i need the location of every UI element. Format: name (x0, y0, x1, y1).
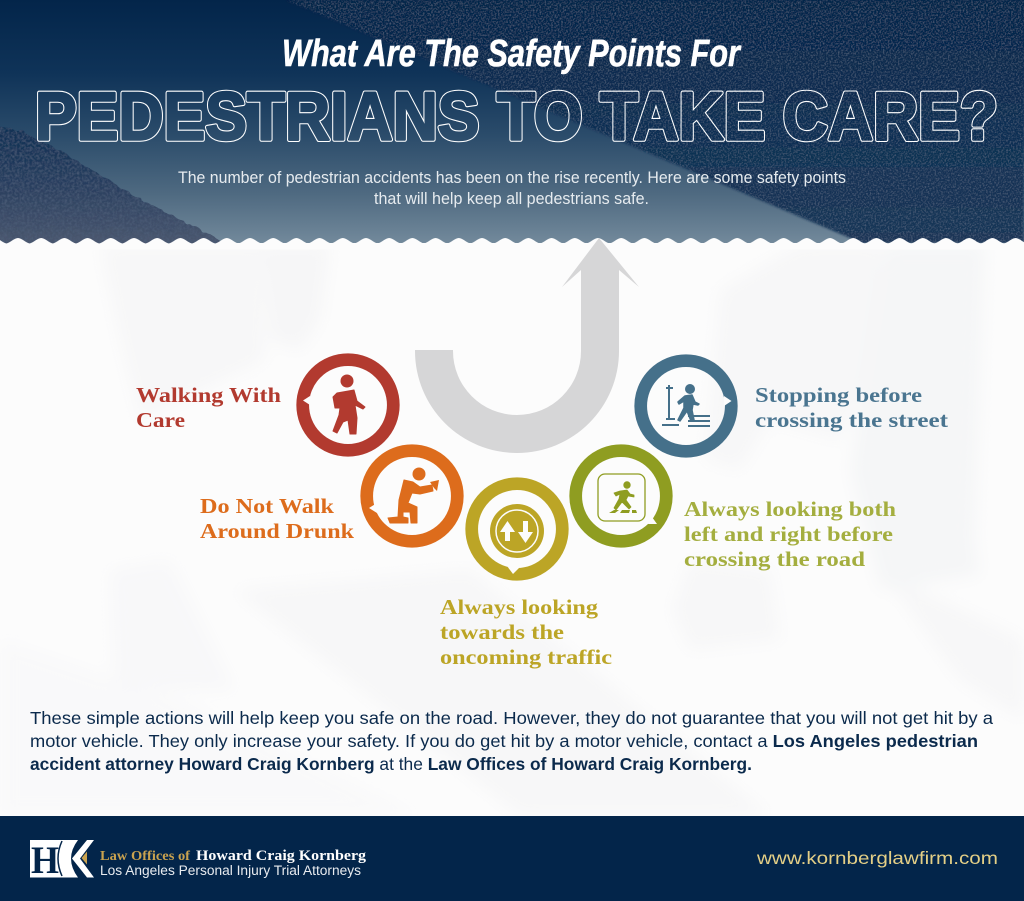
title line 1: What Are The Safety Points For (282, 33, 742, 75)
step: stopping before crossing (641, 361, 948, 451)
logo HCK: H (31, 839, 59, 882)
closing paragraph: motor vehicle. They only increase your safety. If you do get hit by a motor vehicle, contact a Los Angeles pedestrian (30, 731, 978, 751)
step: looking both ways (576, 451, 896, 571)
label: crossing the road (684, 547, 865, 571)
intro text: The number of pedestrian accidents has been on the rise recently. Here are some safety points (178, 168, 846, 187)
firm name: Law Offices of (100, 848, 191, 863)
label (684, 497, 896, 571)
label: Always looking both (684, 497, 896, 521)
ring blue (641, 361, 732, 451)
closing paragraph (30, 708, 993, 774)
faint crosswalk photo background (0, 244, 1024, 816)
footer bar: Howard Craig Kornberg (196, 848, 367, 864)
label: oncoming traffic (440, 645, 612, 669)
intro text: that will help keep all pedestrians safe. (374, 189, 649, 208)
label: towards the (440, 620, 564, 644)
website url: www.kornberglawfirm.com (756, 848, 998, 868)
firm tagline: Los Angeles Personal Injury Trial Attorneys (100, 863, 361, 878)
footer bar (0, 816, 1024, 901)
asphalt patch left (0, 125, 232, 246)
ring green (576, 451, 666, 541)
step: walking with care (136, 360, 393, 450)
large curved arrow (415, 238, 639, 453)
label: Care (136, 408, 185, 432)
logo HCK (30, 839, 94, 882)
closing paragraph: These simple actions will help keep you safe on the road. However, they do not guarantee that you will not get hit by a (30, 708, 993, 728)
label (200, 494, 354, 543)
label (755, 383, 948, 432)
label: left and right before (684, 522, 893, 546)
ring yellow (472, 484, 562, 574)
label (136, 383, 281, 432)
label: Stopping before (755, 383, 922, 407)
icon: two-way arrows sign (490, 504, 544, 558)
scalloped edge (0, 238, 1024, 250)
label (440, 595, 612, 669)
icon: person kneeling with drink (388, 468, 439, 523)
icon: crosswalk sign (598, 474, 645, 521)
ring orange (367, 451, 457, 541)
label: Around Drunk (200, 519, 354, 543)
icon: person at crossing (662, 384, 710, 427)
ring red (303, 360, 393, 450)
intro text (178, 168, 846, 208)
label: Always looking (440, 595, 599, 619)
step: oncoming traffic (440, 484, 612, 669)
dark road band right (286, 0, 1024, 243)
closing paragraph: accident attorney Howard Craig Kornberg at the Law Offices of Howard Craig Kornberg. (30, 754, 752, 774)
icon: walking person (333, 374, 365, 434)
label: Do Not Walk (200, 494, 334, 518)
label: crossing the street (755, 408, 948, 432)
label: Walking With (136, 383, 281, 407)
step: do not walk around drunk (200, 451, 457, 543)
header banner with road photo (0, 0, 1024, 246)
